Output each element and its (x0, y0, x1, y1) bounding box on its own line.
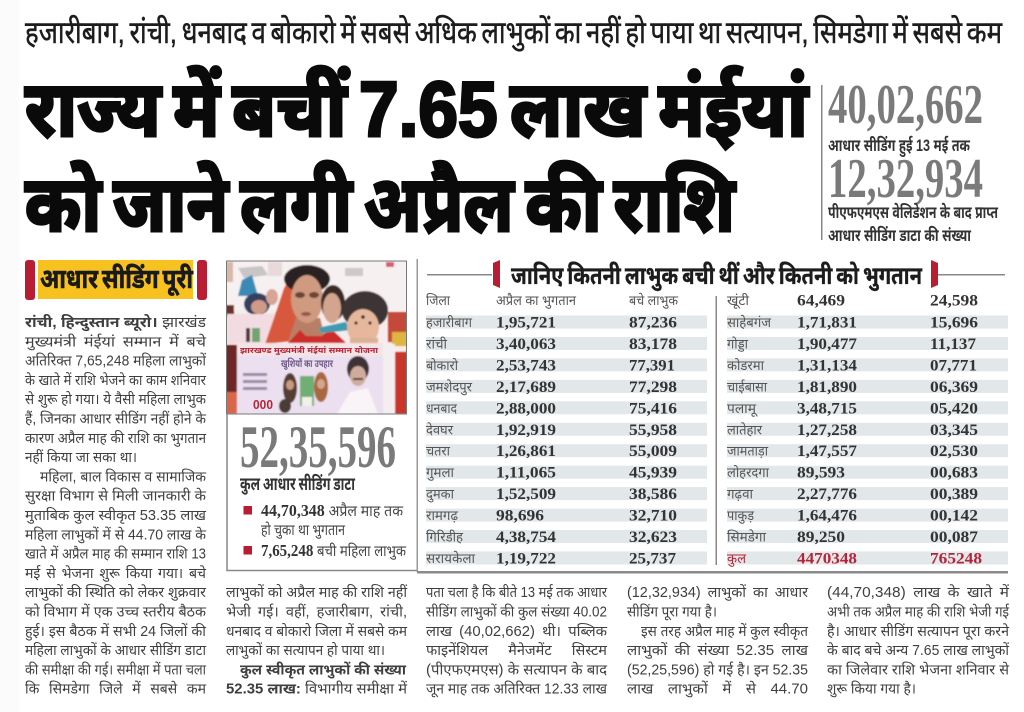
panel: total Aadhaar seeding box (227, 413, 417, 570)
photo frame (226, 261, 406, 414)
right table rows: पाकुड़ (727, 508, 755, 525)
table total row: कुल (727, 551, 747, 568)
article text: column 5: है। आधार सीडिंग सत्यापन पूरा करने (827, 622, 1010, 641)
left table rows: 55,009 (629, 443, 677, 460)
right table rows: 05,420 (930, 400, 978, 417)
right crowd (388, 312, 407, 342)
article text: column 1: मुख्यमंत्री मंईयां सम्मान में बचे (25, 332, 207, 351)
left table rows: 2,88,000 (496, 400, 556, 417)
right table rows: 07,771 (930, 357, 977, 374)
left table rows: जमशेदपुर (426, 377, 472, 396)
left table rows: 98,696 (496, 508, 544, 525)
left table rows (426, 314, 677, 568)
article text: column 5: (44,70,348) लाख के खाते में (827, 583, 1009, 601)
left table rows: हजारीबाग (426, 314, 472, 330)
left table rows: 4,38,754 (496, 529, 556, 546)
article text: column 1: हुई। इस बैठक में सभी 24 जिलों की (25, 623, 206, 641)
article text: column 2: 52.35 लाख: विभागीय समीक्षा में (226, 681, 407, 698)
left table rows: 1,11,065 (496, 465, 556, 482)
photo: women beneficiaries holding banner (226, 261, 407, 414)
heading: Aadhaar seeding complete: आधार सीडिंग पूरी (40, 263, 194, 296)
table header: अप्रैल का भुगतान (496, 292, 576, 310)
article text: column 2: लाभुकों को अप्रैल माह की राशि नहीं (226, 584, 407, 602)
article text: column 5: शुरू किया गया है। (827, 681, 916, 699)
left table rows: देवघर (426, 420, 453, 437)
article text: column 4: लाभुकों की संख्या 52.35 लाख (627, 642, 809, 660)
left table rows: 77,298 (629, 379, 677, 396)
article text: column 1: कि सिमडेगा जिले में सबसे कम (25, 680, 206, 698)
article text: column 4: (12,32,934) लाभुकों का आधार (627, 584, 809, 602)
stat label: total seeding data: कुल आधार सीडिंग डाटा (240, 473, 356, 495)
article text: column 2: कुल स्वीकृत लाभुकों की संख्या (240, 661, 407, 679)
article text: column 5: अभी तक अप्रैल माह की राशि भेजी गई (827, 602, 1010, 620)
photo banner text: खुशियों का उपहार (281, 358, 333, 370)
article text: column 3: फाइनेंशियल मैनेजमेंट सिस्टम (426, 641, 607, 659)
second woman (321, 285, 345, 321)
right table rows: 1,27,258 (797, 422, 857, 439)
main banner (236, 356, 382, 414)
article text: column 1: सुरक्षा विभाग से मिली जानकारी के (25, 487, 207, 506)
left table rows: बोकारो (426, 357, 458, 373)
article text: column 2 (226, 584, 407, 698)
left table rows: 25,737 (629, 550, 676, 568)
article text: column 1: महिला, बाल विकास व सामाजिक (40, 468, 207, 485)
table header: जिला (426, 292, 450, 308)
right table rows: सिमडेगा (727, 528, 767, 544)
right table rows: साहेबगंज (727, 313, 772, 330)
article text: column 1: को विभाग में एक उच्च स्तरीय बैठक (25, 604, 207, 620)
right table rows: 00,683 (930, 465, 978, 482)
right table rows: 1,90,477 (797, 336, 857, 353)
stat label: seeding till 13 May: आधार सीडिंग हुई 13 मई तक (828, 135, 971, 158)
stat: 52,35,596: 52,35,596 (240, 414, 396, 480)
left table rows: धनबाद (426, 401, 458, 416)
left table rows: दुमका (426, 487, 454, 503)
heading: Aadhaar seeding complete (25, 260, 207, 300)
article text: column 5: का जिलेवार राशि भेजना शनिवार से (827, 660, 1009, 678)
left table rows: 45,939 (629, 465, 677, 482)
right table rows: 1,47,557 (797, 443, 857, 460)
left table rows: 2,53,743 (496, 357, 556, 374)
article text: column 1: कारण अप्रैल माह की राशि का भुगतान (25, 430, 207, 448)
left table rows: 1,92,919 (496, 422, 556, 439)
main headline: राज्य में बचीं 7.65 लाख मंईयां (25, 65, 810, 153)
crowd left (244, 293, 270, 315)
article text: column 4: सीडिंग पूरा गया है। (627, 604, 717, 622)
right table rows: खूंटी (727, 292, 750, 310)
stat label: after PFMS validation (828, 202, 998, 245)
lower sides (227, 344, 238, 393)
article text: column 1: अतिरिक्त 7,65,248 महिला लाभुकों (25, 353, 206, 371)
panel: side statistics (821, 74, 998, 245)
article text: column 3 (426, 583, 608, 699)
right table rows: 02,530 (930, 443, 978, 460)
article text: column 5: के बाद बचे अन्य 7.65 लाख लाभुकों (827, 641, 1009, 660)
article text: column 4 (627, 584, 809, 699)
right table rows: 06,369 (930, 379, 978, 396)
bullet: paid till April: 44,70,348 अप्रैल माह तक (261, 501, 403, 520)
article text: column 3: पता चला है कि बीते 13 मई तक आधार (426, 583, 608, 601)
article text: column 3: लाख (40,02,662) थी। पब्लिक (426, 623, 608, 640)
left table rows: चतरा (426, 444, 450, 459)
table total row: 4470348 (797, 550, 857, 568)
background wall shapes (226, 261, 407, 311)
right table rows: 03,345 (930, 422, 978, 439)
right table rows: जामताड़ा (727, 444, 768, 459)
article text: column 4: इस तरह अप्रैल माह में कुल स्वीकृत (641, 623, 809, 641)
woman in orange sari (264, 284, 298, 344)
left table rows: 77,391 (629, 357, 675, 374)
left table rows: रांची (426, 336, 447, 352)
bullet: paid till April: हो चुका था भुगतान (261, 522, 346, 540)
article text: column 3: जून माह तक अतिरिक्त 12.33 लाख (426, 681, 608, 699)
stat label: after PFMS validation: आधार सीडिंग डाटा की संख्या (828, 225, 972, 245)
right table rows: 3,48,715 (797, 400, 857, 417)
photo banner text: 000 (253, 397, 273, 412)
left table rows: गुमला (426, 465, 454, 482)
table total row: 765248 (930, 550, 982, 568)
right table rows: 1,31,134 (797, 357, 857, 374)
article text: column 2: भेजी गई। वहीं, हजारीबाग, रांची, (226, 602, 407, 620)
left table rows: 55,958 (629, 422, 677, 439)
article text: column 2: लाभुकों का सत्यापन हो पाया था। (226, 642, 385, 660)
right table rows: 1,64,476 (797, 508, 857, 525)
child (342, 291, 388, 329)
main headline (25, 65, 810, 248)
left table rows: 2,17,689 (496, 379, 556, 396)
photo banner text (240, 345, 379, 412)
right table rows: 15,696 (930, 314, 978, 332)
right table rows: 1,71,831 (797, 314, 857, 332)
right table rows: कोडरमा (727, 357, 764, 373)
left table rows: सरायकेला (426, 549, 475, 566)
article text: column 1: मई से भेजना शुरू किया गया। बचे (25, 564, 207, 583)
article text: column 3: सीडिंग लाभुकों की कुल संख्या 40.02 (426, 604, 607, 622)
right table rows: 89,593 (797, 465, 845, 482)
main headline: को जाने लगी अप्रैल की राशि (25, 159, 737, 248)
right table rows: 00,142 (930, 508, 978, 525)
left table rows: 38,586 (629, 486, 677, 503)
bullet: paid till April (244, 501, 403, 540)
table total row (727, 550, 982, 568)
table header (426, 291, 679, 310)
right table rows: 00,087 (930, 529, 978, 546)
right table rows: 24,598 (930, 292, 978, 310)
right table rows: 00,389 (930, 486, 978, 503)
table title: जानिए कितनी लाभुक बची थीं और कितनी को भुगतान (511, 261, 923, 291)
right table rows: 2,27,776 (797, 486, 857, 503)
article text: column 3: (पीएफएमएस) के सत्यापन के बाद (426, 660, 607, 678)
left table rows: 3,40,063 (496, 336, 556, 353)
article text: column 4: (52,25,596) हो गई है। इन 52.35 (627, 661, 808, 678)
left table rows: 32,623 (629, 529, 677, 546)
article text: column 1: हैं, जिनका आधार सीडिंग नहीं होने के (25, 410, 207, 428)
bullet: remaining women beneficiaries: 7,65,248 बची महिला लाभुक (261, 541, 406, 561)
table header: बचे लाभुक (629, 291, 679, 310)
right table rows: 89,250 (797, 529, 845, 546)
right table rows: लातेहार (727, 420, 762, 437)
photo banner text: झारखण्ड मुख्यमंत्री मंईयां सम्मान योजना (240, 345, 379, 356)
left table rows: 75,416 (629, 400, 677, 417)
right table rows: गढ़वा (727, 487, 753, 502)
article text: column 1: रांची, हिन्दुस्तान ब्यूरो। झारखंड (25, 314, 206, 332)
article text: column 5 (827, 583, 1010, 699)
right table rows: पलामू (727, 401, 758, 418)
article text: column 2: धनबाद व बोकारो जिला में सबसे कम (226, 622, 407, 640)
left table rows: 32,710 (629, 508, 677, 525)
article text: column 1: महिला लाभुकों के आधार सीडिंग डाटा (25, 641, 206, 660)
article text: column 1: खाते में अप्रैल माह की सम्मान राशि 13 (25, 545, 206, 563)
left table rows: 1,19,722 (496, 550, 556, 568)
right table rows: 1,81,890 (797, 379, 857, 396)
left table rows: 1,26,861 (496, 443, 556, 460)
article text: column 1 (25, 314, 207, 698)
article text: column 1: मुताबिक कुल स्वीकृत 53.35 लाख (25, 507, 207, 525)
left table rows: 83,178 (629, 336, 677, 353)
panel: district table (417, 260, 1008, 574)
left table rows: गिरिडीह (426, 528, 464, 544)
article text: column 1: लाभुकों की स्थिति को लेकर शुक्रवार (25, 583, 207, 602)
article text: column 1: के खाते में राशि भेजने का काम शनिवार (25, 371, 207, 389)
left table rows: 1,95,721 (496, 314, 556, 332)
article text: column 1: महिला लाभुकों में से 44.70 लाख के (25, 525, 207, 544)
left table rows: 87,236 (629, 314, 677, 332)
right table rows (727, 292, 978, 546)
small banner left (227, 314, 277, 344)
article text: column 1: नहीं किया जा सका था। (25, 449, 137, 466)
article text: column 1: से शुरू हो गया। ये वैसी महिला लाभुक (25, 390, 207, 409)
right table rows: लोहरदगा (727, 464, 769, 480)
right table rows: 64,469 (797, 292, 845, 310)
right table rows: 11,137 (930, 336, 976, 353)
article text: column 1: की समीक्षा की गई। समीक्षा में पता चला (25, 661, 206, 678)
left table rows: रामगढ़ (426, 508, 458, 523)
right table rows: चाईबासा (727, 378, 767, 394)
right table rows: गोड्डा (727, 336, 748, 352)
left table rows: 1,52,509 (496, 486, 556, 503)
article text: column 4: लाख लाभुकों में से 44.70 (627, 680, 808, 699)
